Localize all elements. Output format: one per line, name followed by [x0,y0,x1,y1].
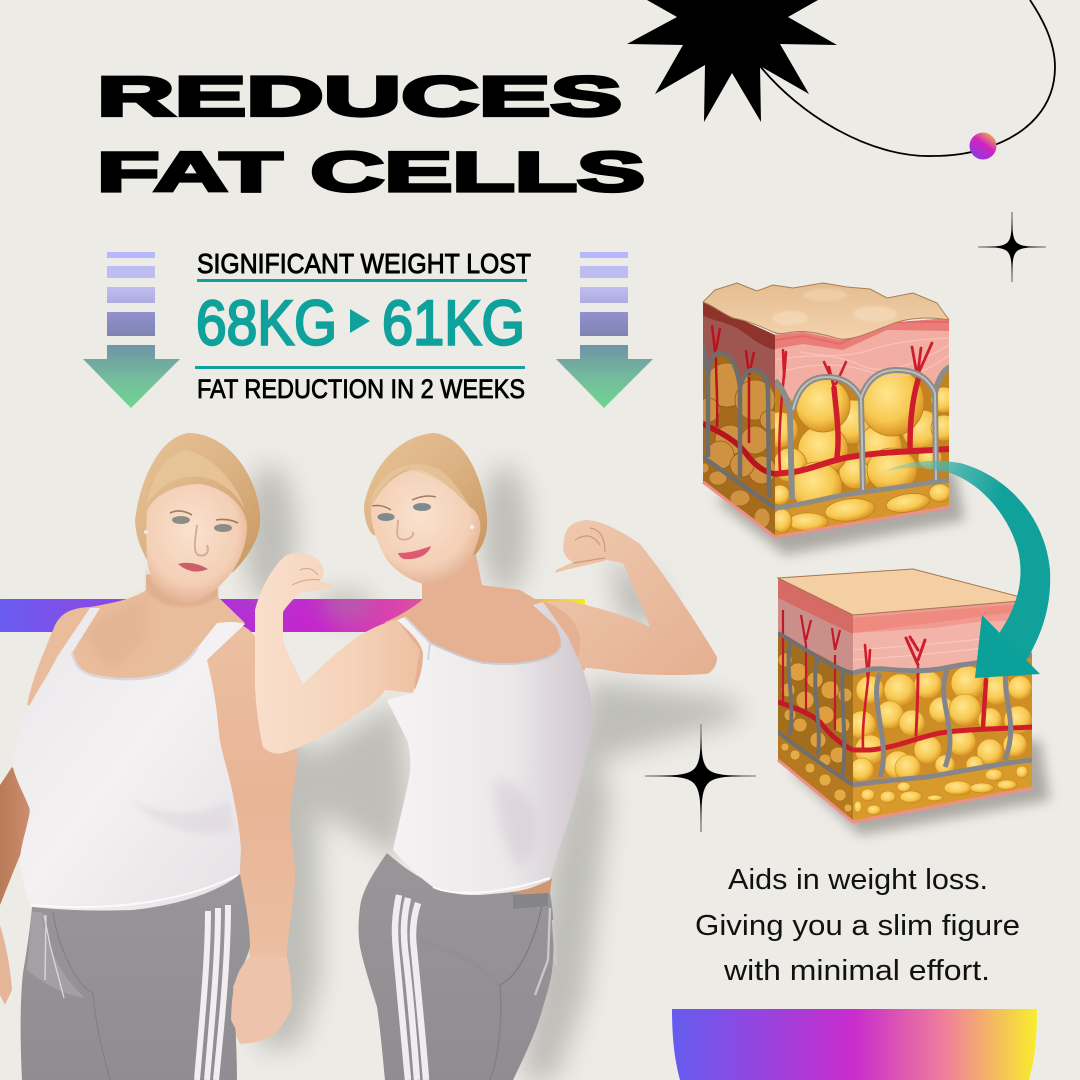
dermis [775,320,950,403]
cube: thick fat layer [696,283,965,555]
bottom gradient block [672,1009,1037,1080]
top skin [703,283,949,339]
bottom edge [778,760,1032,822]
weight figures: 68KG [196,288,337,358]
pants [21,874,250,1080]
cube: reduced fat layer [778,569,1050,835]
tank top [387,602,593,895]
cube shadow [715,470,965,555]
description text: with minimal effort. [723,955,990,987]
curved teal arrow [883,461,1050,678]
fist details right [573,528,605,563]
connective tissue [853,655,1032,785]
bottom fat layer [853,760,1032,824]
description text: Aids in weight loss. [728,864,988,896]
top skin [778,569,1032,615]
bottom fat layer [775,482,949,536]
head [364,433,487,584]
down arrow left [83,252,180,408]
title: FAT CELLS [97,140,645,203]
flexed right arm [545,520,717,675]
drawstring [535,908,556,995]
figure shadows [240,465,740,1080]
facial features [378,513,394,521]
facial features [172,516,190,524]
orbit line with dot [760,0,1055,160]
caption: fat reduction: FAT REDUCTION IN 2 WEEKS [197,374,525,404]
left face [778,578,853,825]
cube shadow [790,740,1050,835]
right face [775,318,949,536]
title: REDUCES [97,64,622,128]
blood vessels [853,637,1032,750]
hand [231,957,291,1043]
down arrow right [556,252,653,408]
side stripes [197,905,228,1080]
sparkle middle [645,724,756,832]
gradient band behind figures [0,599,585,632]
description text: Giving you a slim figure [695,910,1020,942]
head [135,433,260,601]
left face [703,302,775,535]
blood vessels [775,343,950,474]
side stripes [395,895,426,1080]
weight stats block [195,248,531,404]
midriff [510,878,552,896]
weight figures [196,288,525,358]
chest and neck [27,560,245,710]
far arm [0,767,30,905]
woman: after [255,433,717,1080]
shoulders and neck [385,550,590,690]
right face [848,600,1033,825]
neck shade [146,565,218,607]
pants [358,853,554,1080]
near shoulder and arm [205,625,297,1044]
connective tissue [775,367,950,508]
woman: before [0,433,297,1080]
starburst [627,0,837,122]
sparkle top right [978,212,1046,282]
description text [695,864,1020,987]
heading: significant weight lost: SIGNIFICANT WEIGHT LOST [197,248,531,279]
bottom edge [703,482,949,537]
flexed left arm [255,553,420,754]
weight figures: 61KG [382,288,525,358]
title [97,64,645,203]
tank top [12,608,245,910]
